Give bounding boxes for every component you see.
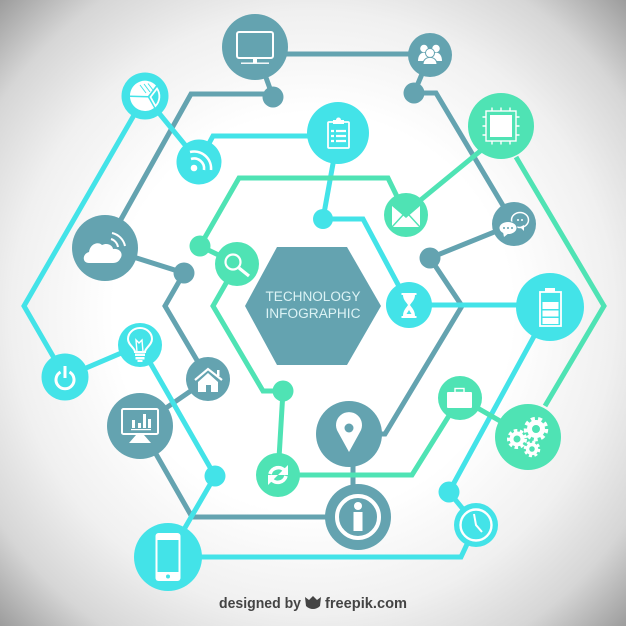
icon: gears xyxy=(495,404,561,470)
icon: wifi signal xyxy=(176,140,222,184)
icon: desktop monitor xyxy=(222,14,288,80)
icon: battery xyxy=(516,273,584,341)
central hexagon title xyxy=(245,247,381,365)
icon: clipboard xyxy=(307,102,369,164)
icon: microchip xyxy=(468,93,534,159)
icon: sync arrows xyxy=(256,453,300,497)
icon: chat bubbles xyxy=(492,202,536,246)
icon: house xyxy=(186,357,230,401)
footer credit: freepik.com xyxy=(325,596,407,612)
connector lines: cyan xyxy=(24,96,550,557)
icon: information xyxy=(325,484,391,550)
icon: bar chart monitor xyxy=(107,393,173,459)
icon: envelope xyxy=(384,193,428,237)
icon: light bulb xyxy=(118,323,162,367)
central hexagon title: INFOGRAPHIC xyxy=(266,306,361,321)
icon: briefcase xyxy=(438,376,482,420)
icon: clock xyxy=(454,503,498,547)
icon: map pin xyxy=(316,401,382,467)
icon: people group xyxy=(408,33,452,77)
footer credit: designed by xyxy=(219,596,301,612)
central hexagon title: TECHNOLOGY xyxy=(266,289,360,304)
junction dots xyxy=(174,82,460,502)
icon: magnifying glass xyxy=(215,242,259,286)
icon: cloud wifi xyxy=(72,215,138,281)
icon: smartphone xyxy=(134,523,202,591)
icon: pie chart xyxy=(122,72,168,120)
connector lines: slate xyxy=(105,47,514,517)
footer credit xyxy=(219,596,407,612)
icon: hourglass xyxy=(386,282,432,328)
icon: power button xyxy=(42,354,88,400)
connector lines: green xyxy=(200,134,604,475)
